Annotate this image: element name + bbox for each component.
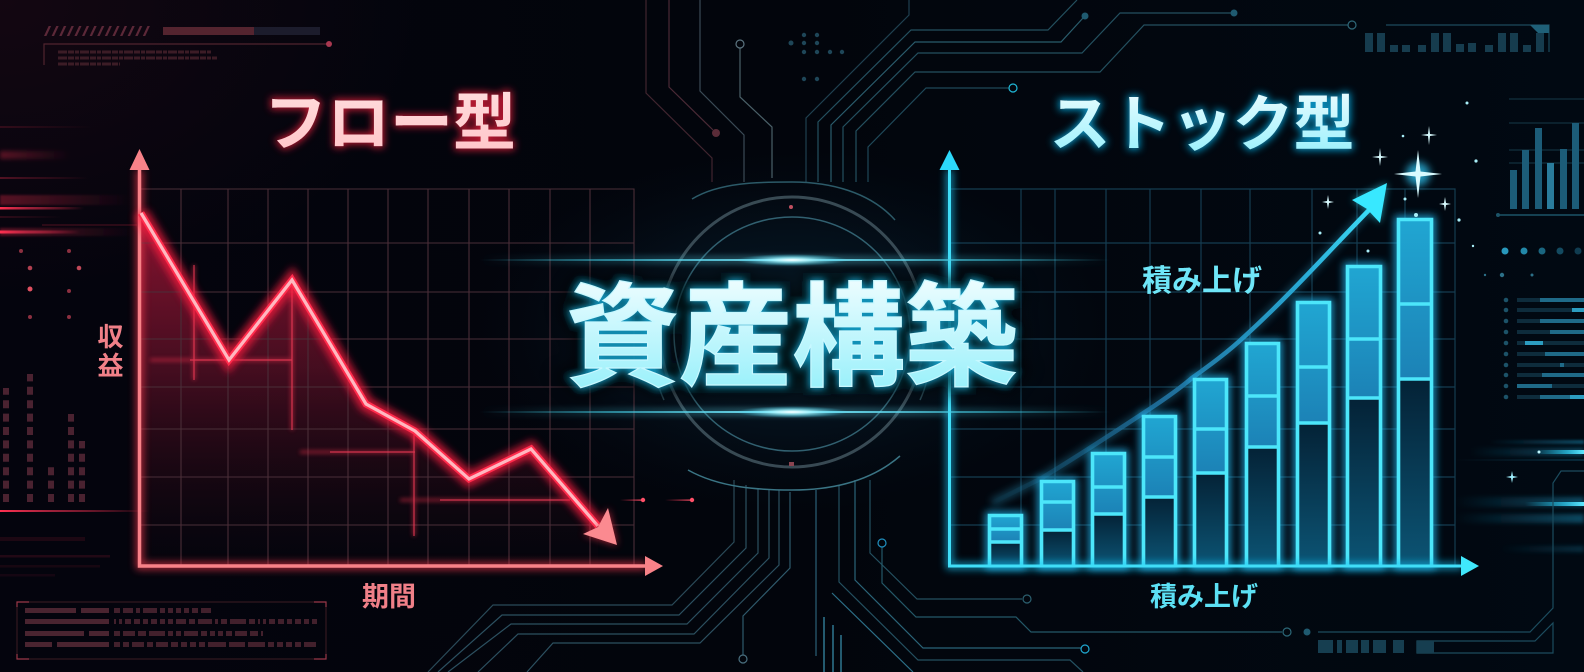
declining line with arrow: [141, 213, 617, 545]
title: フロー型: フロー型: [264, 89, 516, 159]
left decorative header: [44, 26, 332, 65]
title: フロー型: フロー型: [264, 89, 516, 159]
x-axis label: 積み上げ: [1150, 582, 1258, 612]
central ring emblem: [651, 182, 933, 490]
area under the declining line: [139, 213, 598, 566]
top-right bars: [1365, 25, 1549, 52]
central light beams: [480, 254, 1110, 418]
left scatter dots: [19, 249, 81, 319]
chart grid: [949, 189, 1455, 566]
title: ストック型: ストック型: [1049, 90, 1355, 158]
red chart: フロー型: [97, 149, 694, 612]
right glow streaks: [1456, 440, 1584, 552]
x-axis label: 期間: [362, 582, 416, 612]
right data dots and rows: [1484, 248, 1584, 399]
right mini bar chart: [1496, 99, 1584, 217]
bottom-left data panel: [17, 602, 326, 659]
axes: [940, 150, 1479, 576]
left glow streaks: [0, 126, 137, 236]
main title: 資産構築: 資産構築: [566, 275, 1018, 401]
y-axis label: 収: [97, 322, 124, 352]
inner glow guide lines: [150, 265, 570, 536]
left lower streaks: [0, 510, 150, 576]
y-axis label: [97, 322, 124, 381]
curve label: 積み上げ: [1142, 265, 1262, 298]
bottom-right frame and blocks: [1318, 471, 1584, 653]
y-axis label: 益: [97, 351, 124, 381]
stacked bars: [990, 220, 1432, 566]
blue chart: ストック型: [940, 102, 1479, 612]
title: ストック型: ストック型: [1049, 90, 1355, 158]
growth arrow curve: [992, 183, 1387, 503]
axes: [130, 149, 663, 576]
chart grid: [139, 189, 634, 566]
circuit traces: top: [646, 0, 1356, 182]
sparkles: [1318, 102, 1478, 252]
main title: 資産構築: 資産構築: [566, 275, 1018, 401]
main title: 資産構築: 資産構築: [566, 275, 1018, 401]
trailing signal dots: [620, 498, 694, 502]
left segmented bars: [6, 374, 82, 502]
circuit traces: bottom: [428, 480, 1310, 672]
